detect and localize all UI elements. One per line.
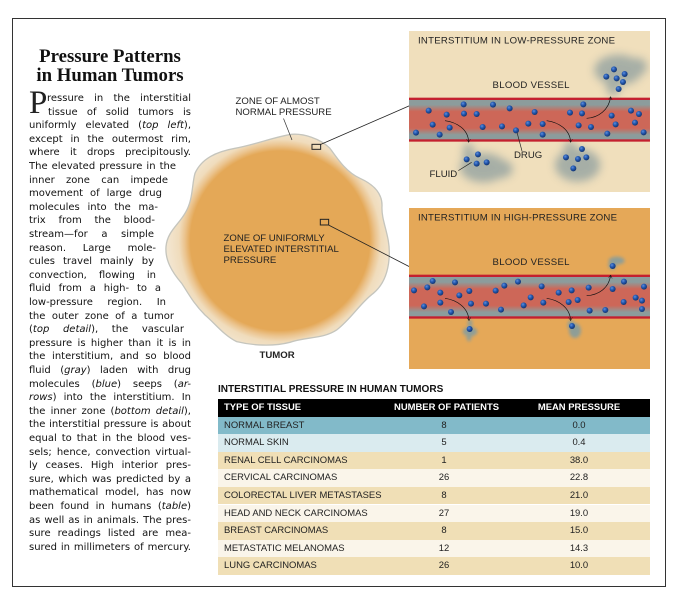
row: normal breast: NORMAL BREAST — [224, 420, 304, 430]
row: normal skin: NORMAL SKIN — [224, 437, 289, 448]
row: head and neck: HEAD AND NECK CARCINOMAS — [224, 508, 368, 518]
header row: MEAN PRESSURE — [538, 402, 620, 413]
row: lung: LUNG CARCINOMAS — [224, 560, 317, 571]
fluid blobs — [463, 257, 625, 341]
article text: sured in millimeters of mercury. — [29, 542, 191, 553]
article text: fluid (gray) laden with drug — [29, 365, 191, 376]
article text: the outer zone of a tumor — [29, 311, 174, 322]
article text: the interstitium, and so blood — [29, 351, 191, 362]
row: normal breast — [218, 416, 650, 434]
connector to low-pressure panel — [320, 106, 410, 144]
article text: sure, which was predicted by a — [29, 474, 191, 485]
drug molecules — [413, 66, 647, 171]
article text: (top detail), the vascular — [29, 324, 184, 335]
row: breast: 15.0 — [570, 525, 588, 536]
row: breast — [218, 522, 650, 540]
arrows — [445, 97, 611, 142]
tumor body — [166, 134, 389, 345]
panel: low-pressure zone — [409, 31, 650, 192]
label: almost normal pressure: NORMAL PRESSURE — [236, 107, 332, 118]
article text: pressure is higher than it is in — [29, 338, 191, 349]
article text: been found in humans (table) — [29, 501, 191, 512]
tumor diagram — [166, 96, 389, 361]
label: almost normal pressure: ZONE OF ALMOST — [236, 96, 320, 107]
row: renal cell — [218, 452, 650, 469]
article text: convection, flowing in — [29, 270, 156, 281]
label: fluid: FLUID — [430, 169, 457, 180]
article text: movement of large drug — [29, 188, 162, 199]
row: colorectal: COLORECTAL LIVER METASTASES — [224, 490, 382, 501]
article text: the inner zone (bottom detail), — [29, 406, 191, 417]
article text: The elevated pressure in the — [29, 161, 176, 172]
label: uniformly elevated pressure: ELEVATED INTERSTITIAL — [224, 244, 339, 255]
row: colorectal: 21.0 — [570, 490, 588, 501]
illustration — [165, 31, 650, 369]
article text: except in the outermost rim, — [29, 134, 191, 145]
table heading: INTERSTITIAL PRESSURE IN HUMAN TUMORS — [218, 384, 443, 395]
label: blood vessel: BLOOD VESSEL — [492, 80, 570, 91]
blood vessel — [409, 99, 650, 141]
header row: NUMBER OF PATIENTS — [394, 402, 499, 413]
row: melanomas: 12 — [439, 543, 449, 554]
row: normal breast: 8 — [441, 420, 447, 430]
article text: equal to that in the blood ves- — [29, 433, 191, 444]
row: normal skin: 0.4 — [572, 437, 586, 448]
title — [36, 46, 184, 86]
label: tumor: TUMOR — [260, 350, 295, 361]
row: renal cell: 1 — [441, 455, 447, 466]
panel heading: INTERSTITIUM IN LOW-PRESSURE ZONE — [418, 36, 615, 46]
article text: tissue of solid tumors is — [48, 107, 191, 118]
row: breast: 8 — [441, 525, 447, 536]
article text: where it drops precipitously. — [29, 147, 191, 158]
article text: ly ceases. High interior pres- — [29, 460, 191, 471]
row: renal cell: RENAL CELL CARCINOMAS — [224, 455, 348, 466]
title: Pressure Patterns — [39, 46, 181, 67]
row: head and neck: 27 — [439, 508, 449, 518]
label: uniformly elevated pressure: ZONE OF UNIFORMLY — [224, 233, 325, 244]
row: normal skin: 5 — [441, 437, 447, 448]
label: drug: DRUG — [514, 150, 542, 161]
article text: mathematical model, has now — [29, 487, 191, 498]
row: normal skin — [218, 434, 650, 452]
row: normal breast: 0.0 — [572, 420, 586, 430]
row: cervical — [218, 469, 650, 487]
row: cervical: CERVICAL CARCINOMAS — [224, 472, 337, 483]
article text: as well as in animals. The pres- — [29, 515, 191, 526]
row: breast: BREAST CARCINOMAS — [224, 525, 328, 536]
row: head and neck: 19.0 — [570, 508, 588, 518]
data table — [218, 384, 650, 575]
row: melanomas: METASTATIC MELANOMAS — [224, 543, 345, 554]
blood vessel — [409, 276, 650, 318]
article text: uniformly elevated (top left), — [29, 120, 191, 131]
article text — [29, 85, 191, 553]
article text: molecules into the ma- — [29, 202, 158, 213]
article text: cules travel mainly by — [29, 256, 154, 267]
row: lung: 10.0 — [570, 560, 588, 571]
row: head and neck — [218, 504, 650, 522]
sample box: high pressure — [320, 219, 329, 225]
label: blood vessel: BLOOD VESSEL — [492, 257, 570, 268]
article text: ressure in the interstitial — [47, 93, 191, 104]
article text: sure readings listed are mea- — [29, 528, 191, 539]
header row: TYPE OF TISSUE — [224, 402, 301, 413]
panel: high-pressure zone — [409, 208, 650, 369]
row: colorectal: 8 — [441, 490, 447, 501]
row: lung: 26 — [439, 560, 449, 571]
row: colorectal — [218, 487, 650, 504]
article text: molecules (blue) seeps (ar- — [29, 379, 191, 390]
article text: fluid from a high- to a — [29, 283, 161, 294]
header row — [218, 399, 650, 417]
arrows — [445, 275, 611, 321]
article text: rows) into the interstitium. In — [29, 392, 191, 403]
drop cap: P — [29, 85, 47, 121]
article text: stream—for a simple — [29, 229, 154, 240]
article text: inner zone can impede — [29, 175, 168, 186]
fluid blobs — [460, 55, 647, 182]
leader: zone label — [284, 118, 292, 140]
drug molecules — [411, 263, 647, 332]
label: uniformly elevated pressure: PRESSURE — [224, 255, 276, 266]
article text: reason. Large mole- — [29, 243, 156, 254]
article text: trix from the blood- — [29, 215, 155, 226]
article text: sels; hence, convection virtual- — [29, 447, 191, 458]
row: renal cell: 38.0 — [570, 455, 588, 466]
row: melanomas — [218, 540, 650, 557]
sample box: low pressure — [312, 144, 321, 149]
panel heading: INTERSTITIUM IN HIGH-PRESSURE ZONE — [418, 212, 617, 224]
article text: low-pressure region. In — [29, 297, 166, 308]
row: melanomas: 14.3 — [570, 543, 588, 554]
row: lung — [218, 557, 650, 575]
article text: the interstitial pressure is about — [29, 419, 191, 430]
row: cervical: 26 — [439, 472, 449, 483]
title: in Human Tumors — [36, 65, 184, 86]
connector to high-pressure panel — [328, 225, 410, 267]
row: cervical: 22.8 — [570, 472, 588, 483]
leader lines — [458, 132, 522, 171]
